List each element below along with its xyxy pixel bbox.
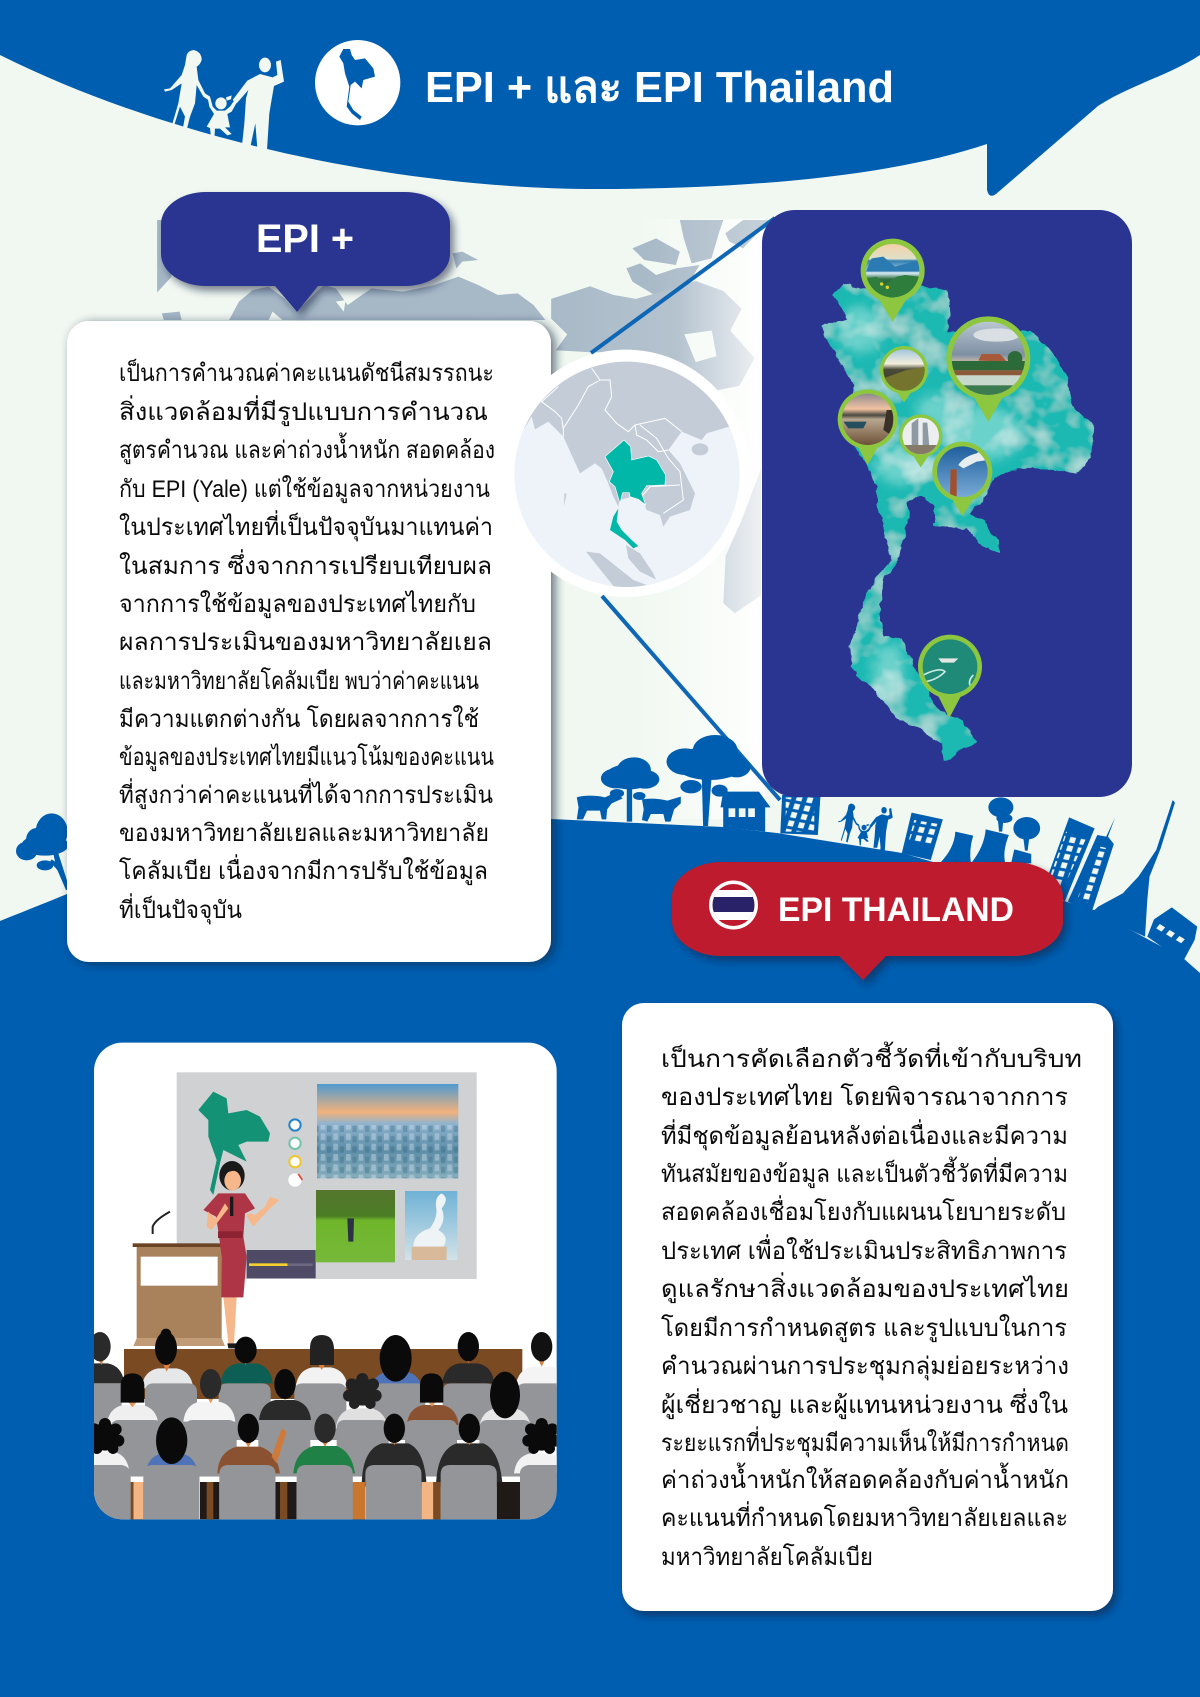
- aisle floor: [94, 1477, 557, 1482]
- text block: EPI Thailand: ที่มีชุดข้อมูลย้อนหลังต่อเนื่องและมีความ: [661, 1119, 1068, 1151]
- house: [721, 792, 771, 832]
- text block: EPI +: ในประเทศไทยที่เป็นปัจจุบันมาแทนค่า: [119, 510, 493, 542]
- text block: EPI +: [119, 358, 495, 925]
- text block: EPI +: และมหาวิทยาลัยโคลัมเบีย พบว่าค่าคะแนน: [119, 667, 479, 695]
- heading: EPI +: EPI +: [256, 217, 354, 261]
- world map background: [157, 219, 770, 819]
- text block: EPI Thailand: ทันสมัยของข้อมูล และเป็นตัวชี้วัดที่มีความ: [661, 1156, 1068, 1189]
- panel: EPI + description: [67, 321, 551, 962]
- text block: EPI Thailand: ผู้เชี่ยวชาญ และผู้แทนหน่วยงาน ซึ่งใน: [661, 1388, 1068, 1420]
- text block: EPI +: มีความแตกต่างกัน โดยผลจากการใช้: [119, 705, 479, 733]
- stage: [124, 1349, 522, 1399]
- globe: [514, 350, 740, 597]
- back row seats: [80, 1383, 569, 1440]
- family silhouette small: [838, 803, 893, 851]
- panel: EPI Thailand description: [622, 1003, 1113, 1611]
- text block: EPI +: สูตรคำนวณ และค่าถ่วงน้ำหนัก สอดคล้อง: [119, 432, 495, 465]
- presentation screen: [177, 1072, 477, 1279]
- middle row: [107, 1369, 531, 1428]
- title: EPI + และ EPI Thailand: [425, 63, 894, 112]
- panel: Thailand map: [762, 210, 1132, 797]
- text block: EPI +: ผลการประเมินของมหาวิทยาลัยเยล: [119, 629, 492, 656]
- text block: EPI Thailand: สอดคล้องเชื่อมโยงกับแผนนโยบายระดับ: [661, 1195, 1066, 1226]
- bubble: EPI +: [161, 192, 450, 312]
- text block: EPI +: โคลัมเบีย เนื่องจากมีการปรับใช้ข้อมูล: [119, 854, 488, 886]
- map pin: hill: [880, 346, 928, 402]
- icon: left tree: [16, 813, 70, 890]
- text block: EPI +: ของมหาวิทยาลัยเยลและมหาวิทยาลัย: [119, 820, 489, 847]
- heading: EPI Thailand: EPI THAILAND: [778, 891, 1014, 929]
- cows: [577, 793, 681, 822]
- text block: EPI Thailand: คะแนนที่กำหนดโดยมหาวิทยาลัยเยลและ: [661, 1501, 1068, 1532]
- cooling towers and smoke: [940, 832, 973, 863]
- text block: EPI +: ที่เป็นปัจจุบัน: [119, 893, 242, 925]
- apartment: [780, 795, 821, 835]
- icon: Thai flag: [709, 880, 758, 930]
- legs between chairs: [131, 1482, 520, 1519]
- icon: Thailand in circle: [315, 40, 400, 125]
- temple spire: [1091, 800, 1175, 937]
- map pin: tall building: [899, 414, 942, 467]
- small house: [1147, 907, 1197, 962]
- text block: EPI +: ในสมการ ซึ่งจากการเปรียบเทียบผล: [119, 549, 492, 580]
- map pin: rice field and temple: [946, 316, 1030, 422]
- text block: EPI Thailand: โดยมีการกำหนดสูตร และรูปแบบในการ: [661, 1314, 1067, 1343]
- map pin: mountains: [861, 239, 925, 322]
- text block: EPI +: จากการใช้ข้อมูลของประเทศไทยกับ: [119, 590, 476, 619]
- connector lines: [591, 218, 780, 800]
- front row: [77, 1414, 566, 1487]
- middle row seats: [111, 1420, 531, 1477]
- text block: EPI Thailand: มหาวิทยาลัยโคลัมเบีย: [661, 1543, 873, 1571]
- map pin: chimney: [932, 442, 992, 516]
- family silhouette: [164, 50, 284, 155]
- map of Thailand: [815, 279, 1100, 761]
- presenter: [203, 1161, 279, 1348]
- text block: EPI Thailand: ดูแลรักษาสิ่งแวดล้อมของประเทศไทย: [661, 1272, 1069, 1304]
- text block: EPI +: กับ EPI (Yale) แต่ใช้ข้อมูลจากหน่วยงาน: [119, 475, 490, 504]
- panel: seminar illustration: [72, 1043, 569, 1524]
- text block: EPI Thailand: คำนวณผ่านการประชุมกลุ่มย่อยระหว่าง: [661, 1353, 1069, 1381]
- front row seats: [94, 1465, 557, 1520]
- ground and skyline: [0, 735, 1200, 1697]
- text block: EPI Thailand: [661, 1041, 1082, 1571]
- text block: EPI Thailand: ระยะแรกที่ประชุมมีความเห็นให้มีการกำหนด: [661, 1426, 1069, 1458]
- text block: EPI Thailand: เป็นการคัดเลือกตัวชี้วัดที่เข้ากับบริบท: [661, 1041, 1082, 1073]
- skyscrapers: [1045, 817, 1095, 902]
- trees: [601, 735, 750, 826]
- microphone: [153, 1212, 170, 1234]
- podium: [133, 1243, 225, 1346]
- map pin: sea with boats: [918, 635, 982, 718]
- text block: EPI Thailand: ประเทศ เพื่อใช้ประเมินประสิทธิภาพการ: [661, 1234, 1067, 1265]
- text block: EPI +: ข้อมูลของประเทศไทยมีแนวโน้มของคะแนน: [119, 743, 494, 772]
- text block: EPI +: สิ่งแวดล้อมที่มีรูปแบบการคำนวณ: [119, 395, 488, 427]
- audience: [72, 1329, 569, 1524]
- back row: [94, 1328, 557, 1388]
- map pin: river: [838, 389, 898, 465]
- text block: EPI Thailand: ค่าถ่วงน้ำหนักให้สอดคล้องกับค่าน้ำหนัก: [661, 1462, 1069, 1494]
- text block: EPI +: ที่สูงกว่าค่าคะแนนที่ได้จากการประเมิน: [119, 778, 493, 810]
- header banner: [0, 0, 1200, 196]
- text block: EPI Thailand: ของประเทศไทย โดยพิจารณาจากการ: [661, 1083, 1068, 1111]
- bubble: EPI Thailand: [672, 862, 1063, 980]
- text block: EPI +: เป็นการคำนวณค่าคะแนนดัชนีสมรรถนะ: [119, 358, 494, 387]
- office block: [902, 813, 943, 860]
